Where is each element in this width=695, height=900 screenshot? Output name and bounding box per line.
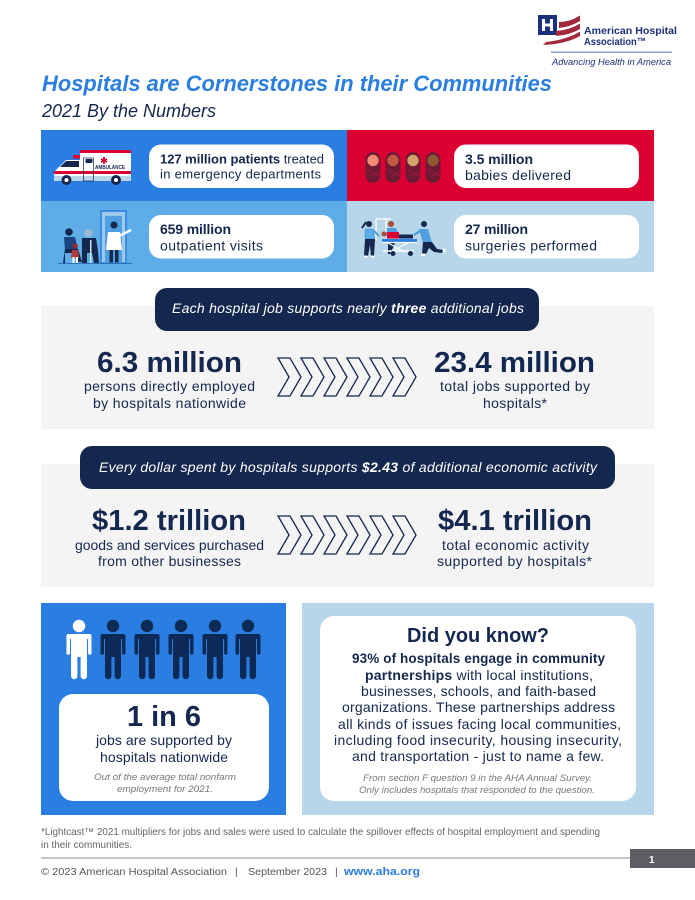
stat pill: 27 million	[465, 221, 528, 237]
footer	[41, 849, 695, 878]
stat card	[59, 694, 269, 801]
stat pill	[149, 144, 334, 188]
stat card: employment for 2021.	[117, 784, 213, 795]
stat: goods and services: $1.2 trillion	[92, 505, 246, 537]
stat: goods and services: from other businesses	[98, 553, 241, 569]
card: businesses, schools, and faith-based	[361, 683, 596, 699]
icon: medical team with gurney	[362, 219, 446, 258]
stat: persons employed: persons directly employed	[84, 378, 255, 394]
stat pill: 127 million patients treated	[160, 152, 324, 166]
panel: jobs supported	[41, 288, 654, 429]
card: all kinds of issues facing local communities,	[338, 716, 621, 732]
stat pill: in emergency departments	[160, 166, 322, 182]
logo: American Hospital Association	[538, 15, 677, 68]
card: organizations. These partnerships address	[342, 699, 615, 715]
stat pill: 659 million	[160, 221, 231, 237]
card: Did you know?	[407, 624, 549, 647]
stat: persons employed: 6.3 million	[97, 347, 242, 379]
card	[320, 616, 636, 801]
stat pill	[454, 215, 639, 258]
stat: goods and services	[75, 505, 264, 569]
panel: surgeries performed	[347, 201, 654, 272]
subtitle: 2021 By the Numbers	[41, 101, 216, 121]
footnote	[41, 827, 600, 851]
stat: persons employed: by hospitals nationwide	[93, 395, 246, 411]
stat card: Out of the average total nonfarm	[94, 772, 236, 783]
banner: jobs multiplier: Each hospital job supports nearly three additional jobs	[172, 300, 524, 316]
card: including food insecurity, housing insecurity,	[334, 732, 622, 748]
stat: goods and services: goods and services purchased	[75, 537, 264, 553]
arrow: chevrons	[278, 358, 416, 396]
footer: © 2023 American Hospital Association	[41, 866, 227, 878]
logo: American Hospital Association: Association™	[584, 36, 646, 48]
icon: four swaddled babies	[366, 152, 440, 183]
stat card: 1 in 6	[127, 701, 201, 733]
stat: total economic activity: total economic activity	[442, 537, 589, 553]
card: 93% of hospitals engage in community	[352, 651, 605, 666]
footer: September 2023	[248, 866, 327, 878]
stat: total jobs: 23.4 million	[434, 347, 595, 379]
panel: babies delivered	[347, 130, 654, 201]
stat: total jobs: total jobs supported by	[440, 378, 590, 394]
stat: total economic activity	[437, 505, 593, 569]
panel: 1 in 6 jobs	[41, 603, 286, 815]
banner: dollar multiplier	[80, 446, 615, 489]
stat card: hospitals nationwide	[100, 749, 228, 765]
panel: outpatient visits	[41, 201, 347, 272]
arrow: chevrons	[278, 516, 416, 554]
stat: persons employed	[84, 347, 255, 411]
stat pill	[149, 215, 334, 258]
stat pill: 3.5 million	[465, 151, 533, 167]
banner: jobs multiplier	[155, 288, 539, 331]
icon: ambulance	[54, 150, 131, 185]
stat: total economic activity: $4.1 trillion	[438, 505, 592, 537]
icon: ambulance: AMBULANCE	[95, 165, 126, 171]
panel: economic activity	[41, 446, 654, 587]
card: From section F question 9 in the AHA Annual Survey.	[363, 773, 592, 784]
footnote: *Lightcast™ 2021 multipliers for jobs and sales were used to calculate the spillover effects of hospital employment and spending	[41, 827, 600, 838]
stat: total economic activity: supported by hospitals*	[437, 553, 593, 569]
card: Only includes hospitals that responded to the question.	[359, 785, 595, 796]
stat pill: surgeries performed	[465, 238, 597, 254]
banner: dollar multiplier: Every dollar spent by hospitals supports $2.43 of additional economic activity	[99, 459, 598, 475]
icon: six people, one highlighted	[66, 620, 260, 679]
card: and transportation - just to name a few.	[352, 748, 604, 764]
icon: patients and doctor at door	[58, 211, 132, 264]
footer: |	[235, 866, 238, 878]
panel: emergency departments	[41, 130, 347, 201]
footer: |	[335, 866, 338, 878]
stat card: jobs are supported by	[95, 732, 232, 748]
stat pill	[454, 144, 639, 188]
footer: 1	[649, 855, 655, 866]
stat: total jobs: hospitals*	[483, 395, 548, 411]
logo: American Hospital Association: American Hospital	[584, 25, 677, 37]
footer: www.aha.org	[343, 866, 420, 878]
logo: American Hospital Association: Advancing Health in America	[551, 57, 671, 68]
stat: total jobs	[434, 347, 595, 411]
stat pill: babies delivered	[465, 167, 571, 183]
card: partnerships with local institutions,	[365, 667, 593, 683]
panel: did you know	[302, 603, 654, 815]
stat pill: outpatient visits	[160, 238, 263, 254]
title: Hospitals are Cornerstones in their Communities	[42, 71, 552, 96]
footnote: in their communities.	[41, 840, 132, 851]
